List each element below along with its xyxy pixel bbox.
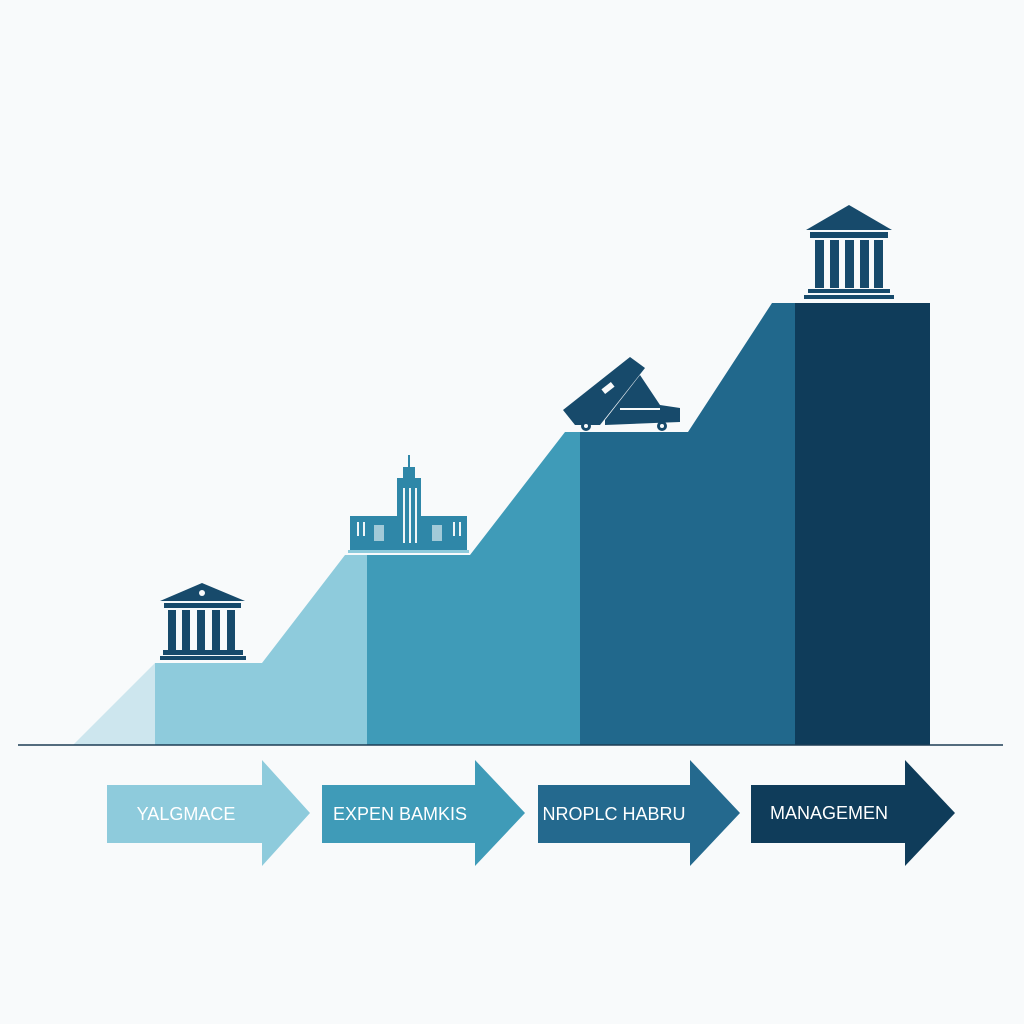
arrow 4 xyxy=(751,760,955,866)
arrow 4: MANAGEMEN xyxy=(770,803,888,823)
arrow 2: EXPEN BAMKIS xyxy=(333,804,467,824)
icon: bank building step 1 xyxy=(160,583,246,660)
icon: city building step 2 xyxy=(348,455,469,553)
icon: bank building top xyxy=(804,205,894,299)
arrow 2 xyxy=(322,760,525,866)
icon: truck step 3 xyxy=(563,357,680,431)
arrow 1: YALGMACE xyxy=(137,804,235,824)
arrow 3: NROPLC HABRU xyxy=(542,804,686,824)
arrow 3 xyxy=(538,760,740,866)
chart: staircase xyxy=(73,303,930,745)
arrow 1 xyxy=(107,760,310,866)
